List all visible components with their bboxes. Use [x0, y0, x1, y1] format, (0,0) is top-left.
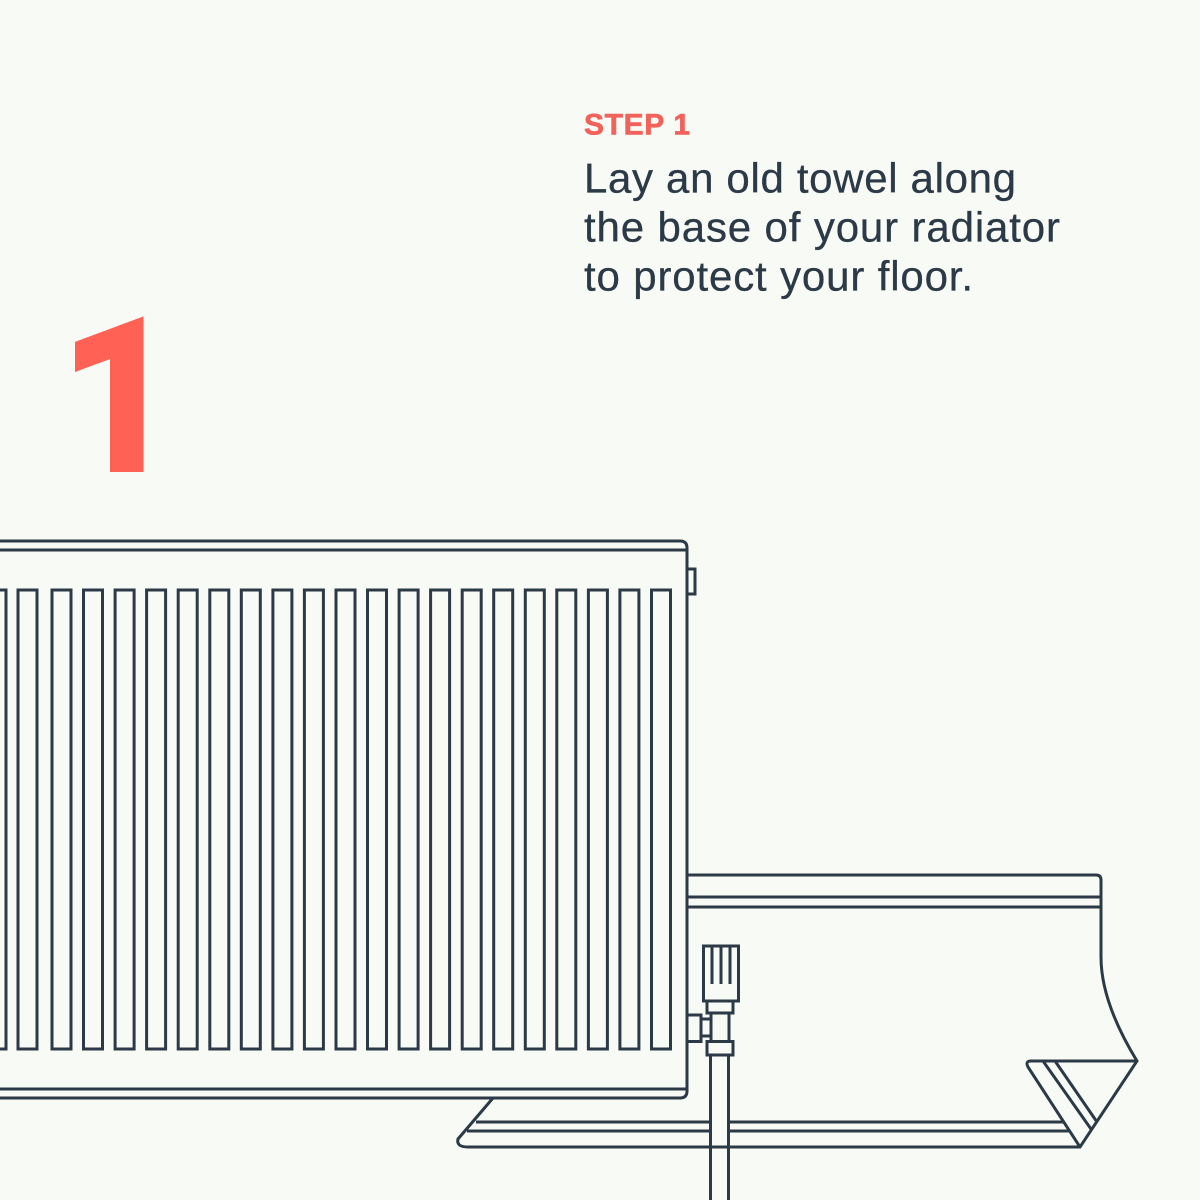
towel bottom hem left of pipe: [467, 1122, 710, 1131]
instruction text: Lay an old towel along: [584, 155, 1016, 202]
towel bottom hem right of pipe: [729, 1122, 1069, 1131]
towel top edge and side: [458, 875, 1137, 1147]
head ribs: [712, 946, 730, 984]
thermostatic head: [704, 946, 738, 1001]
instruction text: [584, 155, 1060, 300]
radiator: [0, 541, 695, 1098]
pipe: [710, 1055, 728, 1200]
fold stripes: [1043, 1061, 1097, 1129]
lower collar: [707, 1042, 733, 1055]
radiator top and bottom trim: [0, 550, 687, 1089]
instruction text: the base of your radiator: [584, 204, 1060, 251]
valve body: [711, 1013, 729, 1042]
side connector: [687, 1015, 701, 1042]
valve and pipe: [687, 946, 738, 1200]
radiator fins: [0, 590, 670, 1049]
towel: [458, 875, 1137, 1147]
connector neck: [701, 1019, 711, 1036]
large step number: [75, 316, 144, 472]
upper collar: [707, 1001, 733, 1013]
towel hem lines: [687, 897, 1101, 907]
step label: STEP 1: [584, 108, 690, 142]
side tab: [687, 569, 695, 594]
large step number: 1: [55, 268, 180, 520]
instruction text: to protect your floor.: [584, 253, 973, 300]
towel fold: [1027, 1061, 1137, 1147]
radiator body: [0, 541, 687, 1098]
